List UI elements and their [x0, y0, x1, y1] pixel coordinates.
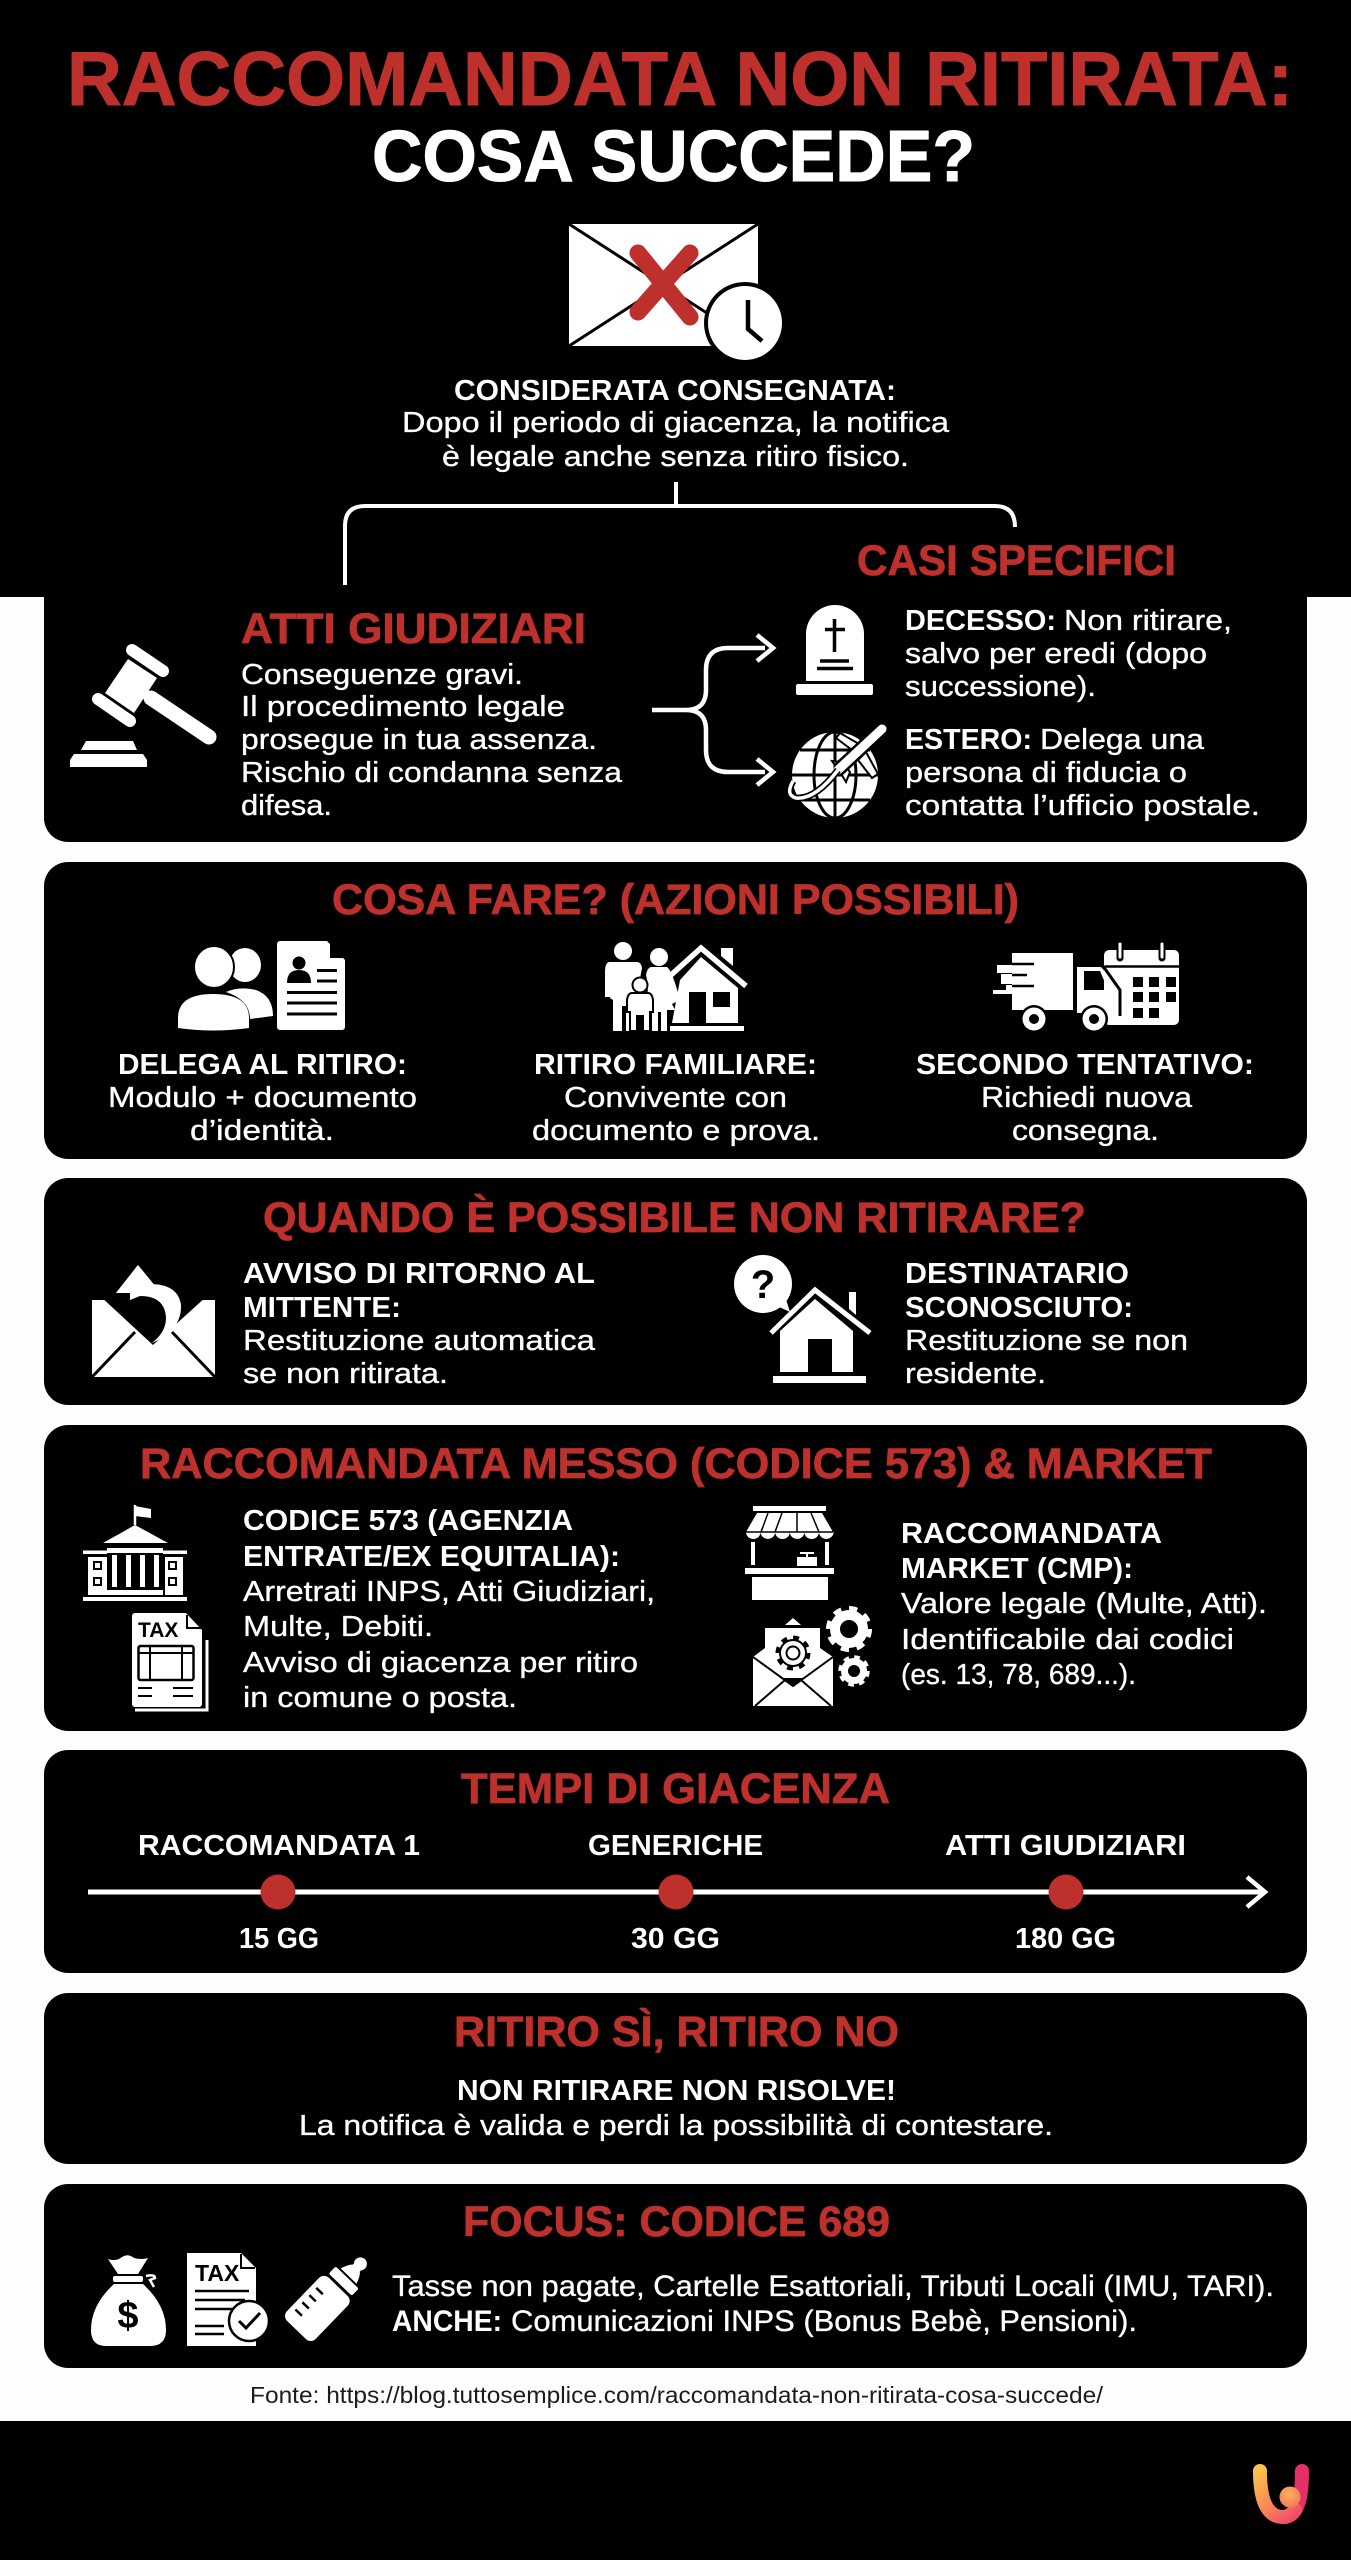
- labels: RACCOMANDATA 1: [138, 1830, 420, 1862]
- arrow: split: [652, 635, 773, 785]
- bracket connector: [345, 482, 1015, 585]
- values: 30 GG: [631, 1923, 720, 1955]
- text: codice 573: [243, 1505, 655, 1714]
- icon: market stall: [745, 1506, 834, 1600]
- text: destinatario sconosciuto: residente.: [905, 1358, 1046, 1390]
- icon: government building: [83, 1505, 187, 1601]
- text: delega al ritiro: d’identità.: [190, 1115, 334, 1147]
- text: codice 689 details: [392, 2270, 1274, 2338]
- text: avviso di ritorno: [243, 1258, 596, 1390]
- icon: money bag: $: [117, 2295, 139, 2337]
- text: codice 573: ENTRATE/EX EQUITALIA):: [243, 1541, 620, 1573]
- text: secondo tentativo: SECONDO TENTATIVO:: [916, 1049, 1254, 1081]
- icon: tax document: [132, 1613, 207, 1710]
- icon: envelope with gears: [753, 1609, 869, 1706]
- text: estero: persona di fiducia o: [905, 757, 1187, 789]
- text: estero: [905, 724, 1260, 822]
- icon: return envelope: [92, 1265, 215, 1377]
- panel: ritiro si ritiro no: [44, 1993, 1307, 2164]
- heading: RITIRO SÌ, RITIRO NO: [454, 2008, 899, 2056]
- body text: Conseguenze gravi.: [241, 659, 523, 691]
- heading: ATTI GIUDIZIARI: [241, 605, 586, 653]
- icon: globe with plane: [790, 729, 882, 818]
- icon: baby bottle: [282, 2245, 379, 2344]
- text: ritiro familiare: documento e prova.: [532, 1115, 820, 1147]
- text: decesso: salvo per eredi (dopo: [905, 638, 1207, 670]
- icon: people and document: [178, 941, 345, 1030]
- text: destinatario sconosciuto: Restituzione se non: [905, 1325, 1188, 1357]
- icon: envelope with red x and clock: [569, 224, 786, 364]
- text: decesso: successione).: [905, 671, 1096, 703]
- text: secondo tentativo: consegna.: [1012, 1115, 1159, 1147]
- warning text: [299, 2075, 1053, 2142]
- text: avviso di ritorno: AVVISO DI RITORNO AL: [243, 1258, 595, 1290]
- text: delega al ritiro: Modulo + documento: [108, 1082, 417, 1114]
- labels: [138, 1830, 1186, 1862]
- text: estero: contatta l’ufficio postale.: [905, 790, 1260, 822]
- panel: focus codice 689: [44, 2184, 1307, 2368]
- panel: cosa fare: [44, 862, 1307, 1159]
- labels: ATTI GIUDIZIARI: [945, 1830, 1186, 1862]
- text: considerata consegnata: [402, 375, 950, 473]
- text: considerata consegnata: Dopo il periodo di giacenza, la notifica: [402, 407, 950, 439]
- text: codice 689 details: Tasse non pagate, Cartelle Esattoriali, Tributi Locali (IMU, TARI).: [392, 2270, 1274, 2303]
- text: raccomandata market: (es. 13, 78, 689...).: [901, 1659, 1136, 1691]
- heading: casi specifici: CASI SPECIFICI: [857, 537, 1176, 585]
- text: destinatario sconosciuto: [905, 1258, 1188, 1390]
- icon: tax check document: TAX: [195, 2260, 240, 2286]
- header band and first panel: [0, 0, 1351, 842]
- text: avviso di ritorno: se non ritirata.: [243, 1358, 448, 1390]
- text: codice 573: in comune o posta.: [243, 1682, 517, 1714]
- values: [239, 1923, 1116, 1955]
- text: raccomandata market: MARKET (CMP):: [901, 1553, 1133, 1585]
- text: codice 573: Arretrati INPS, Atti Giudiziari,: [243, 1576, 655, 1608]
- body text: difesa.: [241, 790, 332, 822]
- icon: house with question mark: [734, 1255, 870, 1383]
- heading: TEMPI DI GIACENZA: [461, 1765, 890, 1813]
- labels: GENERICHE: [588, 1830, 763, 1862]
- text: ritiro familiare: Convivente con: [564, 1082, 787, 1114]
- text: codice 573: Multe, Debiti.: [243, 1611, 433, 1643]
- body text: [241, 659, 623, 822]
- warning text: La notifica è valida e perdi la possibilità di contestare.: [299, 2110, 1053, 2142]
- text: raccomandata market: Valore legale (Multe, Atti).: [901, 1588, 1267, 1620]
- timeline arrow: [88, 1874, 1265, 1910]
- text: decesso: DECESSO:: [905, 605, 1056, 637]
- text: ritiro familiare: [532, 1049, 820, 1147]
- body text: Il procedimento legale: [241, 691, 565, 723]
- text: secondo tentativo: [916, 1049, 1254, 1147]
- title: [67, 37, 1293, 197]
- logo: [1260, 2471, 1302, 2517]
- text: estero: Delega una: [1040, 724, 1205, 756]
- icon: money bag: [91, 2255, 166, 2346]
- text: delega al ritiro: [108, 1049, 417, 1147]
- warning text: NON RITIRARE NON RISOLVE!: [457, 2075, 896, 2107]
- text: secondo tentativo: Richiedi nuova: [981, 1082, 1193, 1114]
- title: COSA SUCCEDE?: [372, 117, 975, 197]
- text: decesso: [905, 605, 1232, 703]
- text: avviso di ritorno: MITTENTE:: [243, 1292, 401, 1324]
- icon: tombstone: [796, 605, 873, 695]
- text: codice 689 details: Comunicazioni INPS (Bonus Bebè, Pensioni).: [511, 2305, 1137, 2338]
- source note: Fonte: https://blog.tuttosemplice.com/raccomandata-non-ritirata-cosa-succede/: [250, 2382, 1104, 2408]
- panel: tempi di giacenza: [44, 1750, 1307, 1973]
- body text: Rischio di condanna senza: [241, 757, 623, 789]
- panel: quando non ritirare: [44, 1178, 1307, 1405]
- text: destinatario sconosciuto: DESTINATARIO: [905, 1258, 1129, 1290]
- text: decesso: Non ritirare,: [1064, 605, 1232, 637]
- text: considerata consegnata: CONSIDERATA CONSEGNATA:: [454, 375, 896, 407]
- panel: raccomandata messo e market: [44, 1425, 1307, 1731]
- text: delega al ritiro: DELEGA AL RITIRO:: [118, 1049, 407, 1081]
- text: ritiro familiare: RITIRO FAMILIARE:: [534, 1049, 817, 1081]
- heading: RACCOMANDATA MESSO (CODICE 573) & MARKET: [140, 1440, 1212, 1488]
- text: raccomandata market: [901, 1518, 1267, 1691]
- text: estero: ESTERO:: [905, 724, 1032, 756]
- text: destinatario sconosciuto: SCONOSCIUTO:: [905, 1292, 1133, 1324]
- icon: gavel: [70, 650, 209, 767]
- text: raccomandata market: Identificabile dai codici: [901, 1624, 1234, 1656]
- heading: QUANDO È POSSIBILE NON RITIRARE?: [263, 1194, 1086, 1242]
- icon: family and house: [605, 942, 746, 1031]
- text: codice 689 details: ANCHE:: [392, 2305, 502, 2338]
- icon: truck and calendar: [993, 943, 1179, 1033]
- body text: prosegue in tua assenza.: [241, 724, 597, 756]
- values: 180 GG: [1015, 1923, 1116, 1955]
- text: avviso di ritorno: Restituzione automatica: [243, 1325, 596, 1357]
- icon: tax check document: [187, 2253, 269, 2346]
- heading: FOCUS: CODICE 689: [463, 2198, 890, 2246]
- icon: tax document: TAX: [138, 1619, 178, 1642]
- text: codice 573: Avviso di giacenza per ritiro: [243, 1647, 638, 1679]
- icon: house with question mark: ?: [751, 1263, 775, 1307]
- text: raccomandata market: RACCOMANDATA: [901, 1518, 1162, 1550]
- text: considerata consegnata: è legale anche senza ritiro fisico.: [442, 441, 909, 473]
- title: RACCOMANDATA NON RITIRATA:: [67, 37, 1293, 122]
- values: 15 GG: [239, 1923, 319, 1955]
- panel: atti giudiziari: [70, 605, 1260, 822]
- heading: COSA FARE? (AZIONI POSSIBILI): [332, 876, 1019, 924]
- footer band: [0, 2421, 1351, 2560]
- text: codice 573: CODICE 573 (AGENZIA: [243, 1505, 573, 1537]
